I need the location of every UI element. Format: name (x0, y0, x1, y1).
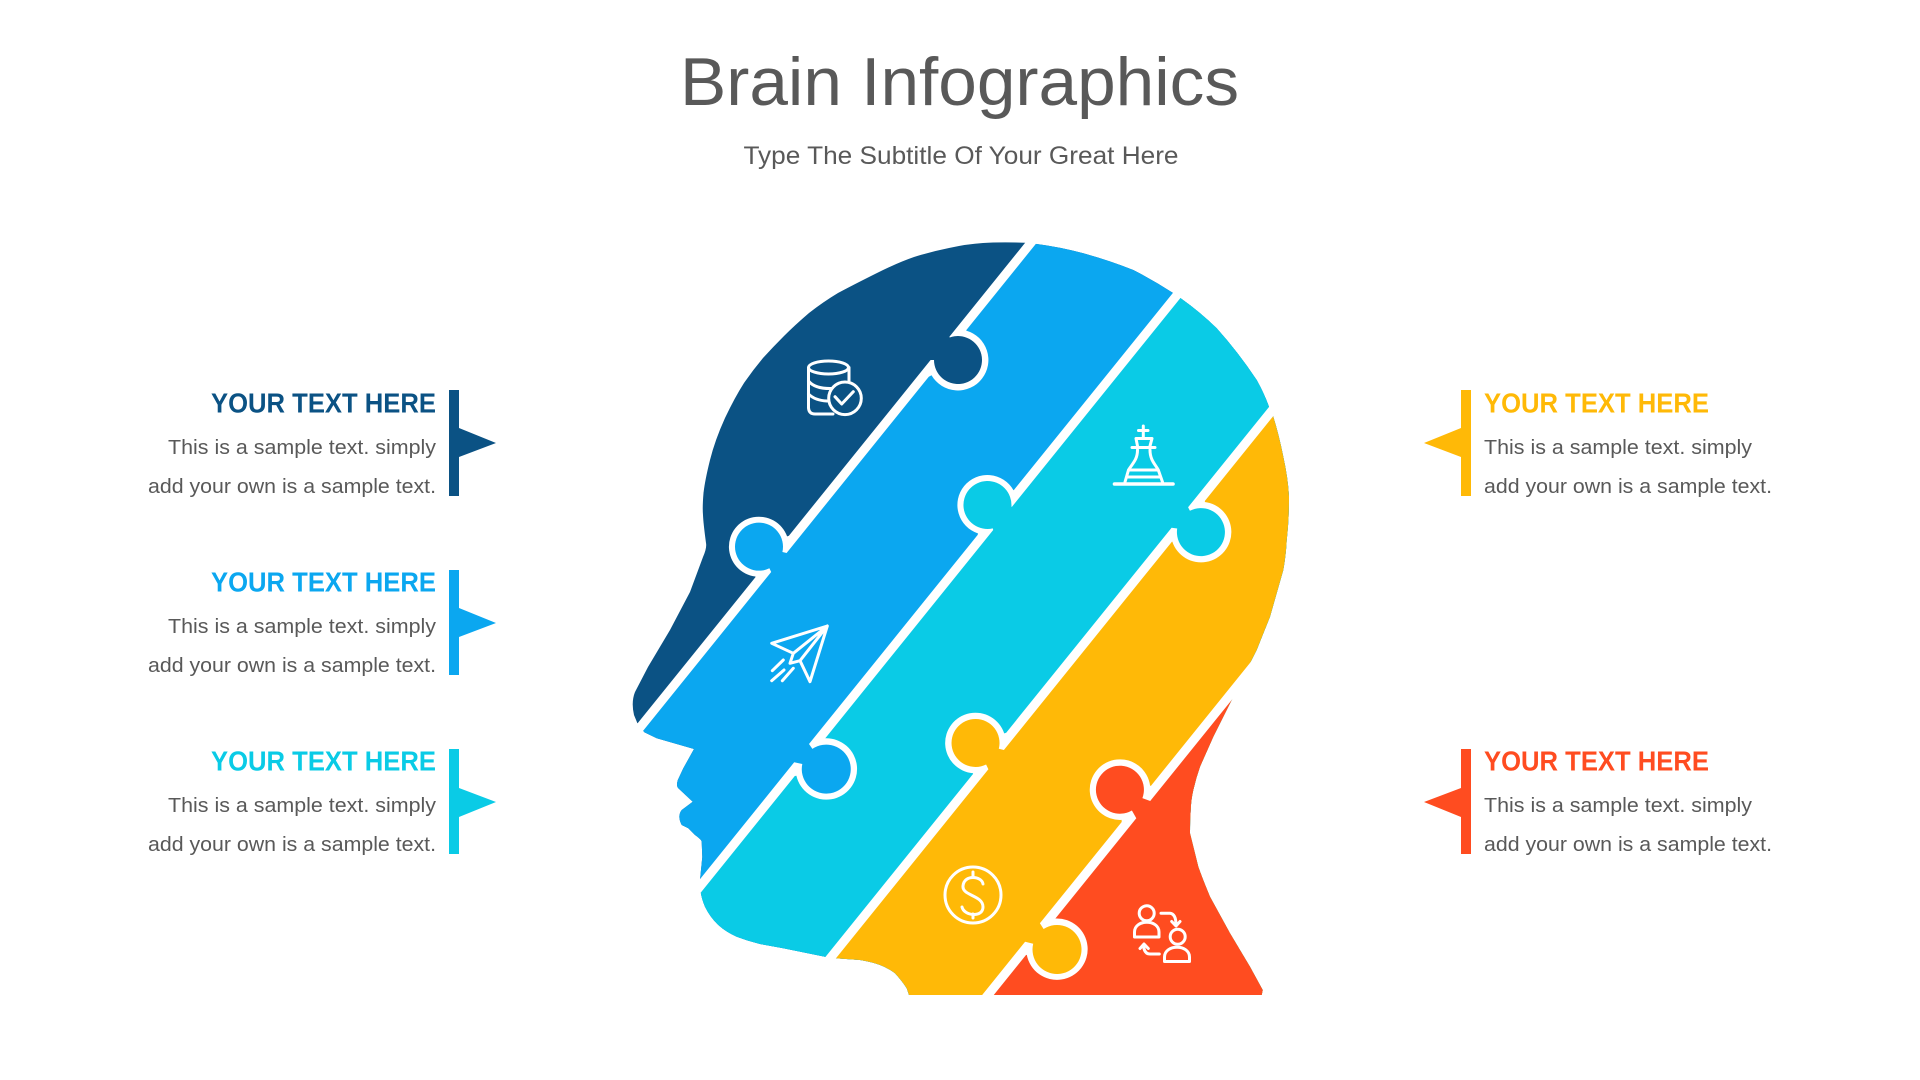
title: Brain Infographics (680, 44, 1239, 120)
body text: This is a sample text. simply (1484, 794, 1753, 817)
icon: chess king (1114, 426, 1173, 484)
body text: This is a sample text. simply (168, 436, 437, 459)
callout: yellow (1424, 388, 1772, 498)
puzzle pieces (632, 242, 1289, 995)
body text: add your own is a sample text. (148, 654, 436, 677)
body text: add your own is a sample text. (148, 833, 436, 856)
flag (449, 749, 496, 854)
body text: This is a sample text. simply (168, 615, 437, 638)
heading: YOUR TEXT HERE (211, 388, 436, 418)
body text: This is a sample text. simply (168, 794, 437, 817)
heading: YOUR TEXT HERE (1484, 388, 1709, 418)
heading: YOUR TEXT HERE (211, 566, 436, 598)
body text (1484, 794, 1772, 856)
flag (1424, 749, 1471, 854)
callout: blue (148, 566, 496, 677)
body text: add your own is a sample text. (148, 475, 436, 498)
icon: paper plane (772, 626, 827, 682)
icon: database check (808, 361, 861, 415)
body text (148, 794, 437, 856)
body text: This is a sample text. simply (1484, 436, 1753, 459)
subtitle: Type The Subtitle Of Your Great Here (744, 142, 1178, 170)
callout: orange (1424, 746, 1772, 856)
body text (1484, 436, 1772, 498)
flag (1424, 390, 1471, 496)
flag (449, 570, 496, 675)
heading: YOUR TEXT HERE (1484, 746, 1709, 776)
head puzzle (632, 242, 1289, 995)
callout: dark blue (148, 388, 496, 498)
callout: cyan (148, 746, 496, 856)
icon: people exchange (1134, 906, 1190, 962)
body text (148, 615, 437, 677)
flag (449, 390, 496, 496)
body text: add your own is a sample text. (1484, 833, 1772, 856)
heading: YOUR TEXT HERE (211, 746, 436, 776)
body text (148, 436, 437, 498)
icon: dollar coin (945, 867, 1001, 923)
body text: add your own is a sample text. (1484, 475, 1772, 498)
